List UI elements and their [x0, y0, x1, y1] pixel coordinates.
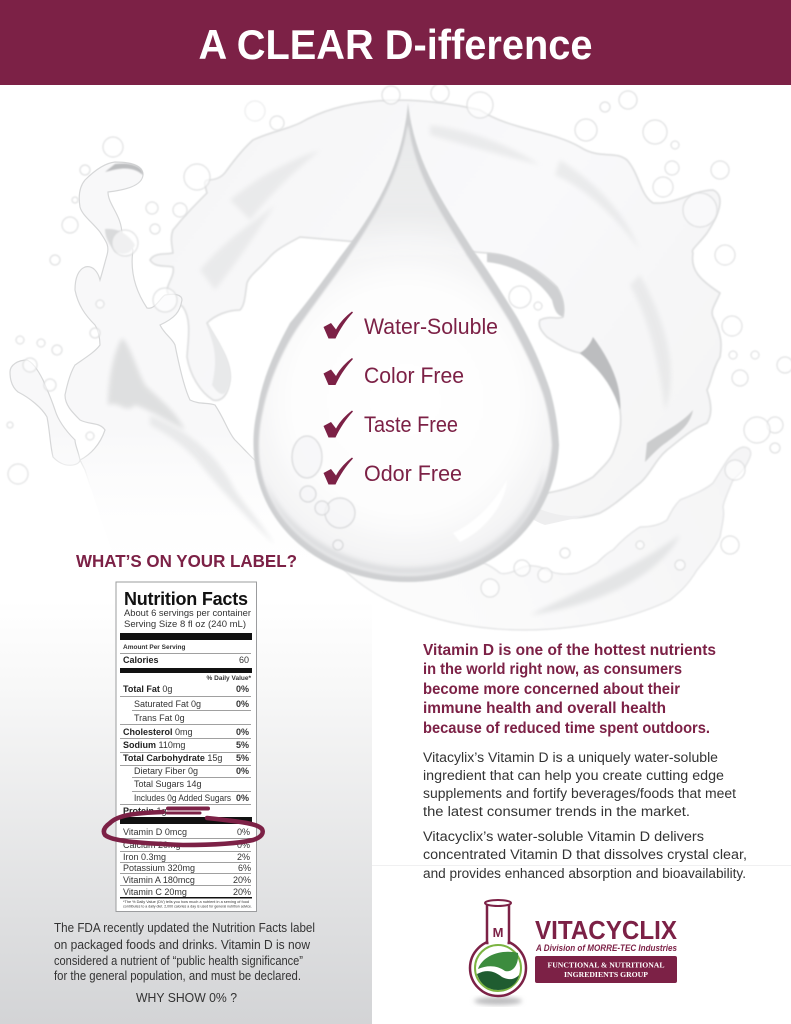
logo: wordmark — [535, 915, 678, 983]
hand-drawn circle around vitamin D — [104, 808, 263, 845]
lead paragraph: because of reduced time spent outdoors. — [423, 720, 710, 737]
nutrition facts label: Trans Fat 0g — [134, 713, 185, 723]
nutrition facts label: Sodium 110mg — [123, 740, 185, 750]
check item: water-soluble: Water-Soluble — [364, 314, 498, 339]
nutrition facts label: Calories — [123, 655, 159, 665]
logo: flask: M — [493, 925, 503, 940]
nutrition facts label: 6% — [238, 863, 251, 873]
nutrition facts label: 0% — [236, 793, 249, 803]
nutrition facts label: 5% — [236, 753, 249, 763]
title: A CLEAR D-ifference — [198, 21, 592, 68]
lower inner shading — [265, 465, 545, 574]
check item: odor free: Odor Free — [364, 461, 462, 486]
nutrition facts label: contributes to a daily diet. 2,000 calories a day is used for general nutrition advice. — [123, 904, 252, 908]
check item: color free: Color Free — [364, 363, 464, 388]
nutrition facts label — [116, 582, 256, 912]
nutrition facts label: 0% — [237, 840, 250, 850]
nutrition facts label: 2% — [237, 852, 250, 862]
right and top swirl — [150, 100, 721, 518]
water drop — [253, 103, 559, 582]
body paragraph 1: ingredient that can help you create cutting edge — [423, 768, 724, 783]
nutrition facts label: 20% — [233, 887, 251, 897]
nutrition facts label: Serving Size 8 fl oz (240 mL) — [124, 619, 246, 630]
nutrition facts label: Calcium 20mg — [123, 840, 181, 850]
FDA note: considered a nutrient of “public health significance” — [54, 954, 303, 968]
nutrition facts label: Saturated Fat 0g — [134, 699, 201, 709]
nutrition facts label: Potassium 320mg — [123, 863, 195, 873]
nutrition facts label: Total Carbohydrate 15g — [123, 753, 222, 763]
bubbles — [7, 84, 791, 597]
nutrition facts label: Vitamin A 180mcg — [123, 875, 195, 885]
nutrition facts label: 0% — [236, 727, 249, 737]
nutrition facts label: Iron 0.3mg — [123, 852, 166, 862]
nutrition facts label: 0% — [236, 684, 249, 694]
FDA note — [54, 921, 315, 1005]
checklist — [324, 312, 498, 486]
lead paragraph — [423, 642, 716, 737]
nutrition facts label: Protein 1g — [123, 806, 167, 816]
check item: water-soluble — [324, 312, 498, 339]
FDA note: The FDA recently updated the Nutrition Facts label — [54, 921, 315, 935]
nutrition facts label: 0% — [237, 827, 250, 837]
nutrition facts label: % Daily Value* — [207, 675, 251, 682]
swirl shading — [200, 125, 671, 410]
body paragraph 1: the latest consumer trends in the market. — [423, 804, 690, 819]
highlight — [453, 480, 507, 542]
check item: odor free — [324, 458, 462, 486]
check item: taste free: Taste Free — [364, 412, 458, 437]
nutrition facts label: 60 — [239, 655, 249, 665]
body paragraph 2 — [423, 829, 747, 881]
logo: wordmark: A Division of MORRE-TEC Industries — [535, 943, 677, 953]
body paragraph 1: Vitacylix’s Vitamin D is a uniquely water-soluble — [423, 750, 718, 765]
FDA note: for the general population, and must be declared. — [54, 969, 301, 983]
drop tail behind — [524, 500, 590, 525]
lead paragraph: Vitamin D is one of the hottest nutrients — [423, 642, 716, 659]
heading: what's on your label: WHAT’S ON YOUR LABEL? — [76, 551, 297, 571]
body paragraph 2: concentrated Vitamin D that dissolves crystal clear, — [423, 847, 747, 862]
nutrition facts label: About 6 servings per container — [124, 608, 251, 619]
bubbles inside drop — [292, 436, 355, 550]
FDA note: on packaged foods and drinks. Vitamin D is now — [54, 938, 311, 952]
body paragraph 2: Vitacyclix’s water-soluble Vitamin D delivers — [423, 829, 704, 844]
lead paragraph: in the world right now, as consumers — [423, 661, 682, 678]
nutrition facts label: 0% — [236, 766, 249, 776]
left splash — [10, 162, 330, 600]
logo: wordmark: INGREDIENTS GROUP — [564, 970, 648, 979]
nutrition facts label: Amount Per Serving — [123, 644, 186, 651]
nutrition facts label: Cholesterol 0mg — [123, 727, 193, 737]
nutrition facts label: Includes 0g Added Sugars — [134, 793, 231, 803]
lead paragraph: immune health and overall health — [423, 700, 666, 717]
body paragraph 1: supplements and fortify beverages/foods that meet — [423, 786, 736, 801]
lead paragraph: become more concerned about their — [423, 681, 680, 698]
nutrition facts label: 0% — [236, 699, 249, 709]
logo: flask — [470, 900, 526, 1005]
nutrition facts label: Vitamin C 20mg — [123, 887, 187, 897]
why show 0%: WHY SHOW 0% ? — [136, 991, 237, 1005]
logo: wordmark: VITACYCLIX — [535, 915, 678, 945]
nutrition facts label: Vitamin D 0mcg — [123, 827, 187, 837]
check item: taste free — [324, 410, 458, 438]
lower swirl — [335, 447, 751, 630]
nutrition facts label: 20% — [233, 875, 251, 885]
body paragraph 1 — [423, 750, 736, 819]
milk splash — [10, 100, 751, 630]
title banner — [0, 0, 791, 85]
nutrition facts label: Total Fat 0g — [123, 684, 172, 694]
logo: wordmark: FUNCTIONAL & NUTRITIONAL — [548, 960, 664, 970]
body paragraph 2: and provides enhanced absorption and bioavailability. — [423, 866, 746, 881]
nutrition facts label: Total Sugars 14g — [134, 779, 202, 789]
check item: color free — [324, 358, 464, 388]
nutrition facts label: Dietary Fiber 0g — [134, 766, 198, 776]
nutrition facts label: *The % Daily Value (DV) tells you how much a nutrient in a serving of food — [123, 900, 249, 904]
nutrition facts label: Nutrition Facts — [124, 589, 248, 609]
panel: label background — [0, 600, 372, 1024]
nutrition facts label: 5% — [236, 740, 249, 750]
